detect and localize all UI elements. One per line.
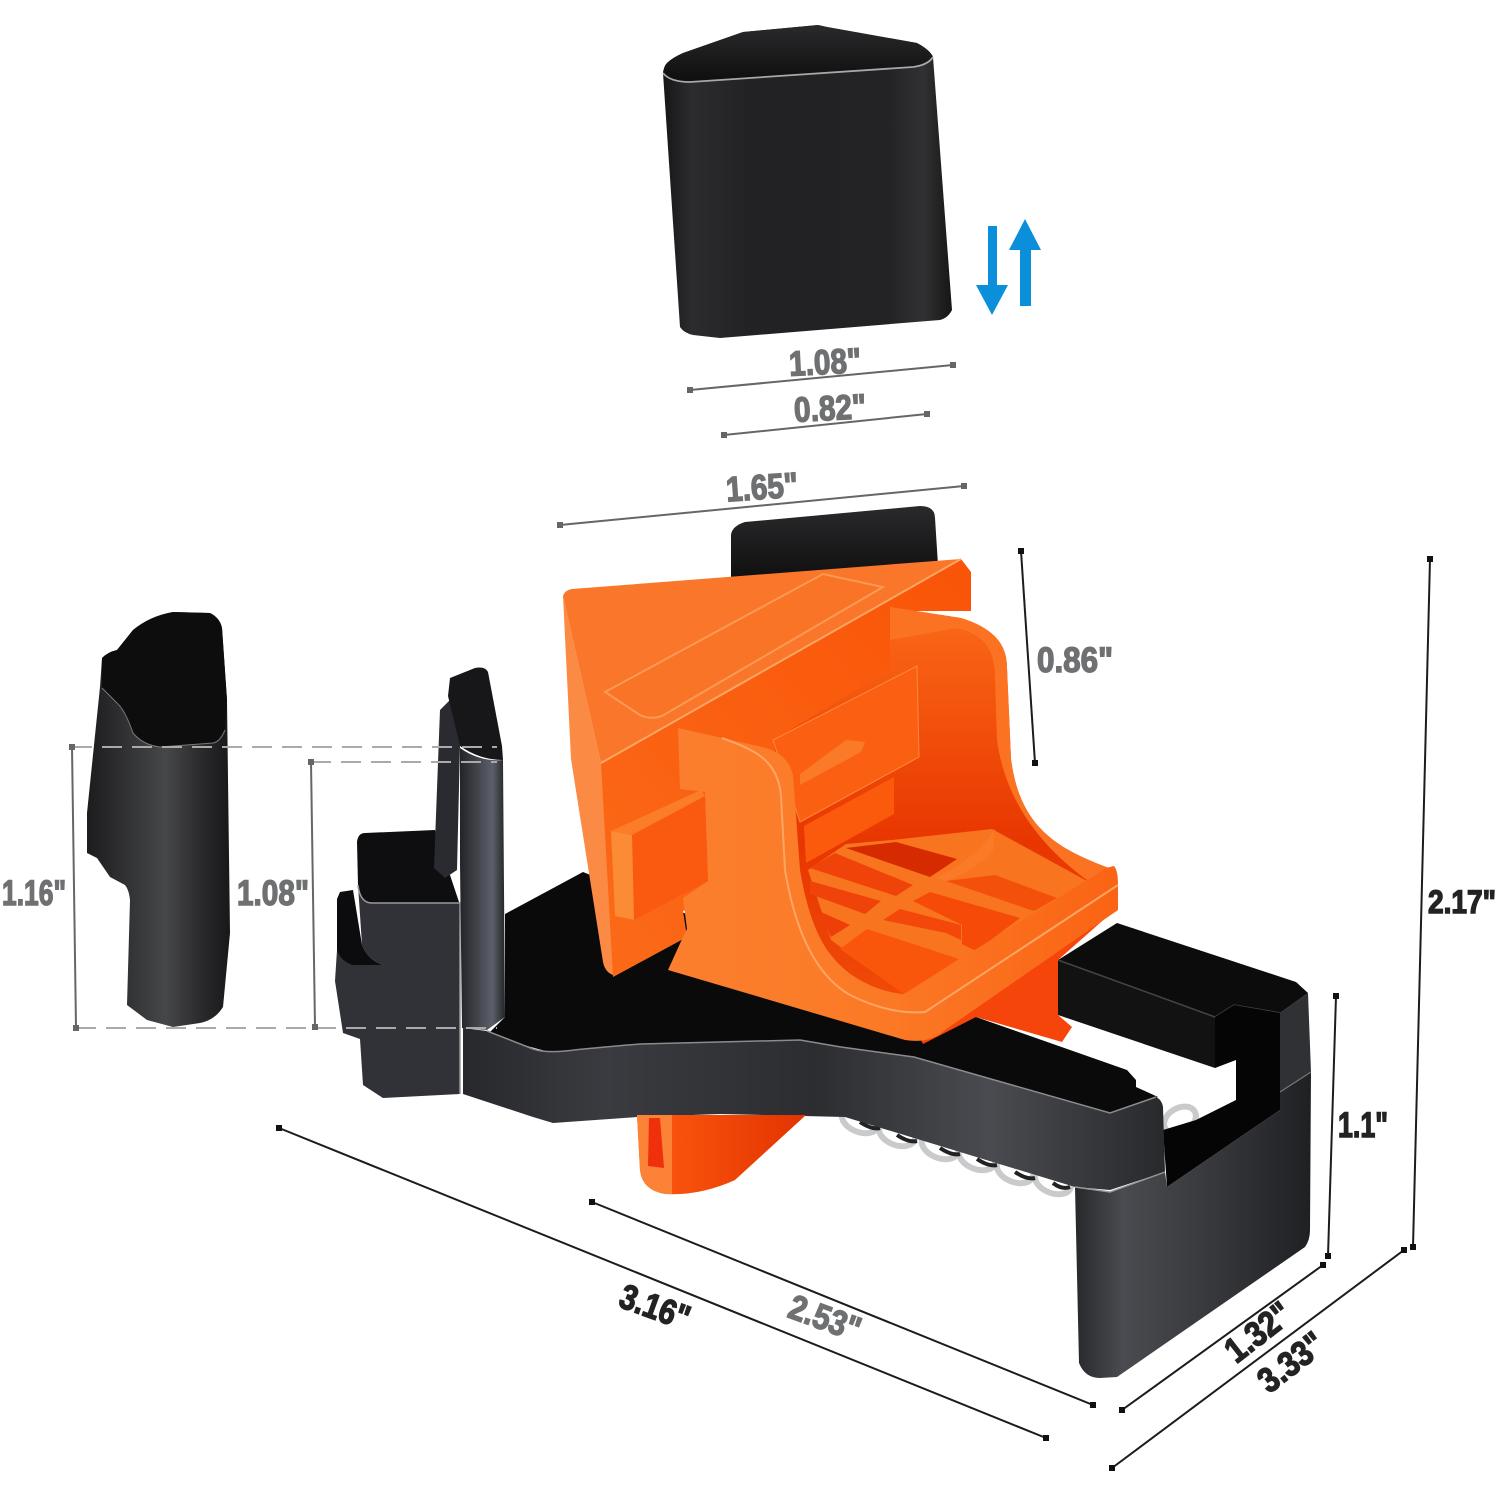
- dimension 0.86 jaw height: 0.86": [1037, 641, 1113, 680]
- dimension 2.53 frame length: 2.53": [783, 1287, 866, 1349]
- orange wedge jaw: [563, 559, 1118, 1041]
- dimension 1.1 frame height: 1.1": [1338, 1106, 1388, 1145]
- wedge highlight line: [601, 559, 961, 763]
- back rail: [773, 666, 919, 822]
- dimension 1.16 cap height: 1.16": [2, 874, 66, 913]
- dimension 1.1 frame height: [1325, 993, 1388, 1259]
- side rubber cap: [87, 612, 230, 1027]
- dimension 1.08 post height: 1.08": [237, 874, 309, 913]
- dimension 3.16 total length: 3.16": [614, 1277, 695, 1338]
- left light face: [563, 596, 632, 975]
- dimension 1.08 post height: [237, 759, 318, 1030]
- far wall edge: [890, 607, 1114, 880]
- black base: U-frame end wall: [1075, 993, 1311, 1378]
- dimension 0.86 jaw height: [1018, 548, 1113, 766]
- black base: U-frame top and block: [1058, 923, 1308, 1187]
- dashed guides: [72, 747, 497, 1028]
- black base: front wall: [463, 1028, 1165, 1192]
- orange rear jaw: [900, 907, 1118, 1044]
- black base: clip behind post: [434, 700, 460, 878]
- black base: holder box: [335, 830, 460, 1098]
- under rail: [804, 777, 894, 863]
- dimension 0.82 cap inner width: [721, 387, 930, 438]
- front face: [601, 559, 971, 977]
- interior cavity: [773, 607, 1118, 1000]
- dimension 1.08 cap width: 1.08": [788, 341, 862, 384]
- black pad behind orange jaw: [731, 506, 938, 582]
- top face: [563, 559, 961, 763]
- near side wall and rim: [668, 728, 1118, 1041]
- floor grid: [808, 829, 1087, 994]
- recessed top label: [605, 574, 883, 718]
- dimension 1.32 frame width: 1.32": [1217, 1294, 1299, 1371]
- blue up and down arrows: [976, 219, 1041, 315]
- dimension 2.53 frame length: [589, 1199, 1096, 1408]
- dimension 1.16 cap height: [2, 744, 79, 1031]
- rail bar: [800, 740, 865, 785]
- dimension 2.17 total height: [1410, 556, 1496, 1250]
- dimension 0.82 cap inner width: 0.82": [793, 387, 867, 430]
- dimension 1.08 cap width: [687, 341, 956, 393]
- dimension 1.65 jaw width: 1.65": [725, 466, 799, 509]
- dimension 1.65 jaw width: [557, 466, 967, 528]
- dimension 3.33 total width: 3.33": [1250, 1324, 1332, 1401]
- jaw tab: [611, 790, 708, 920]
- return spring: [838, 1101, 1201, 1199]
- wall highlight lines: [722, 738, 1118, 1012]
- black base: top plate: [487, 872, 1158, 1117]
- orange slider below base: [637, 1115, 806, 1194]
- dimension 3.16 total length: [276, 1125, 1049, 1441]
- top rubber cap: [663, 25, 952, 338]
- dimension 1.32 frame width: [1119, 1262, 1326, 1413]
- black base: upright post: [448, 668, 505, 1030]
- dimension 3.33 total width: [1109, 1247, 1407, 1471]
